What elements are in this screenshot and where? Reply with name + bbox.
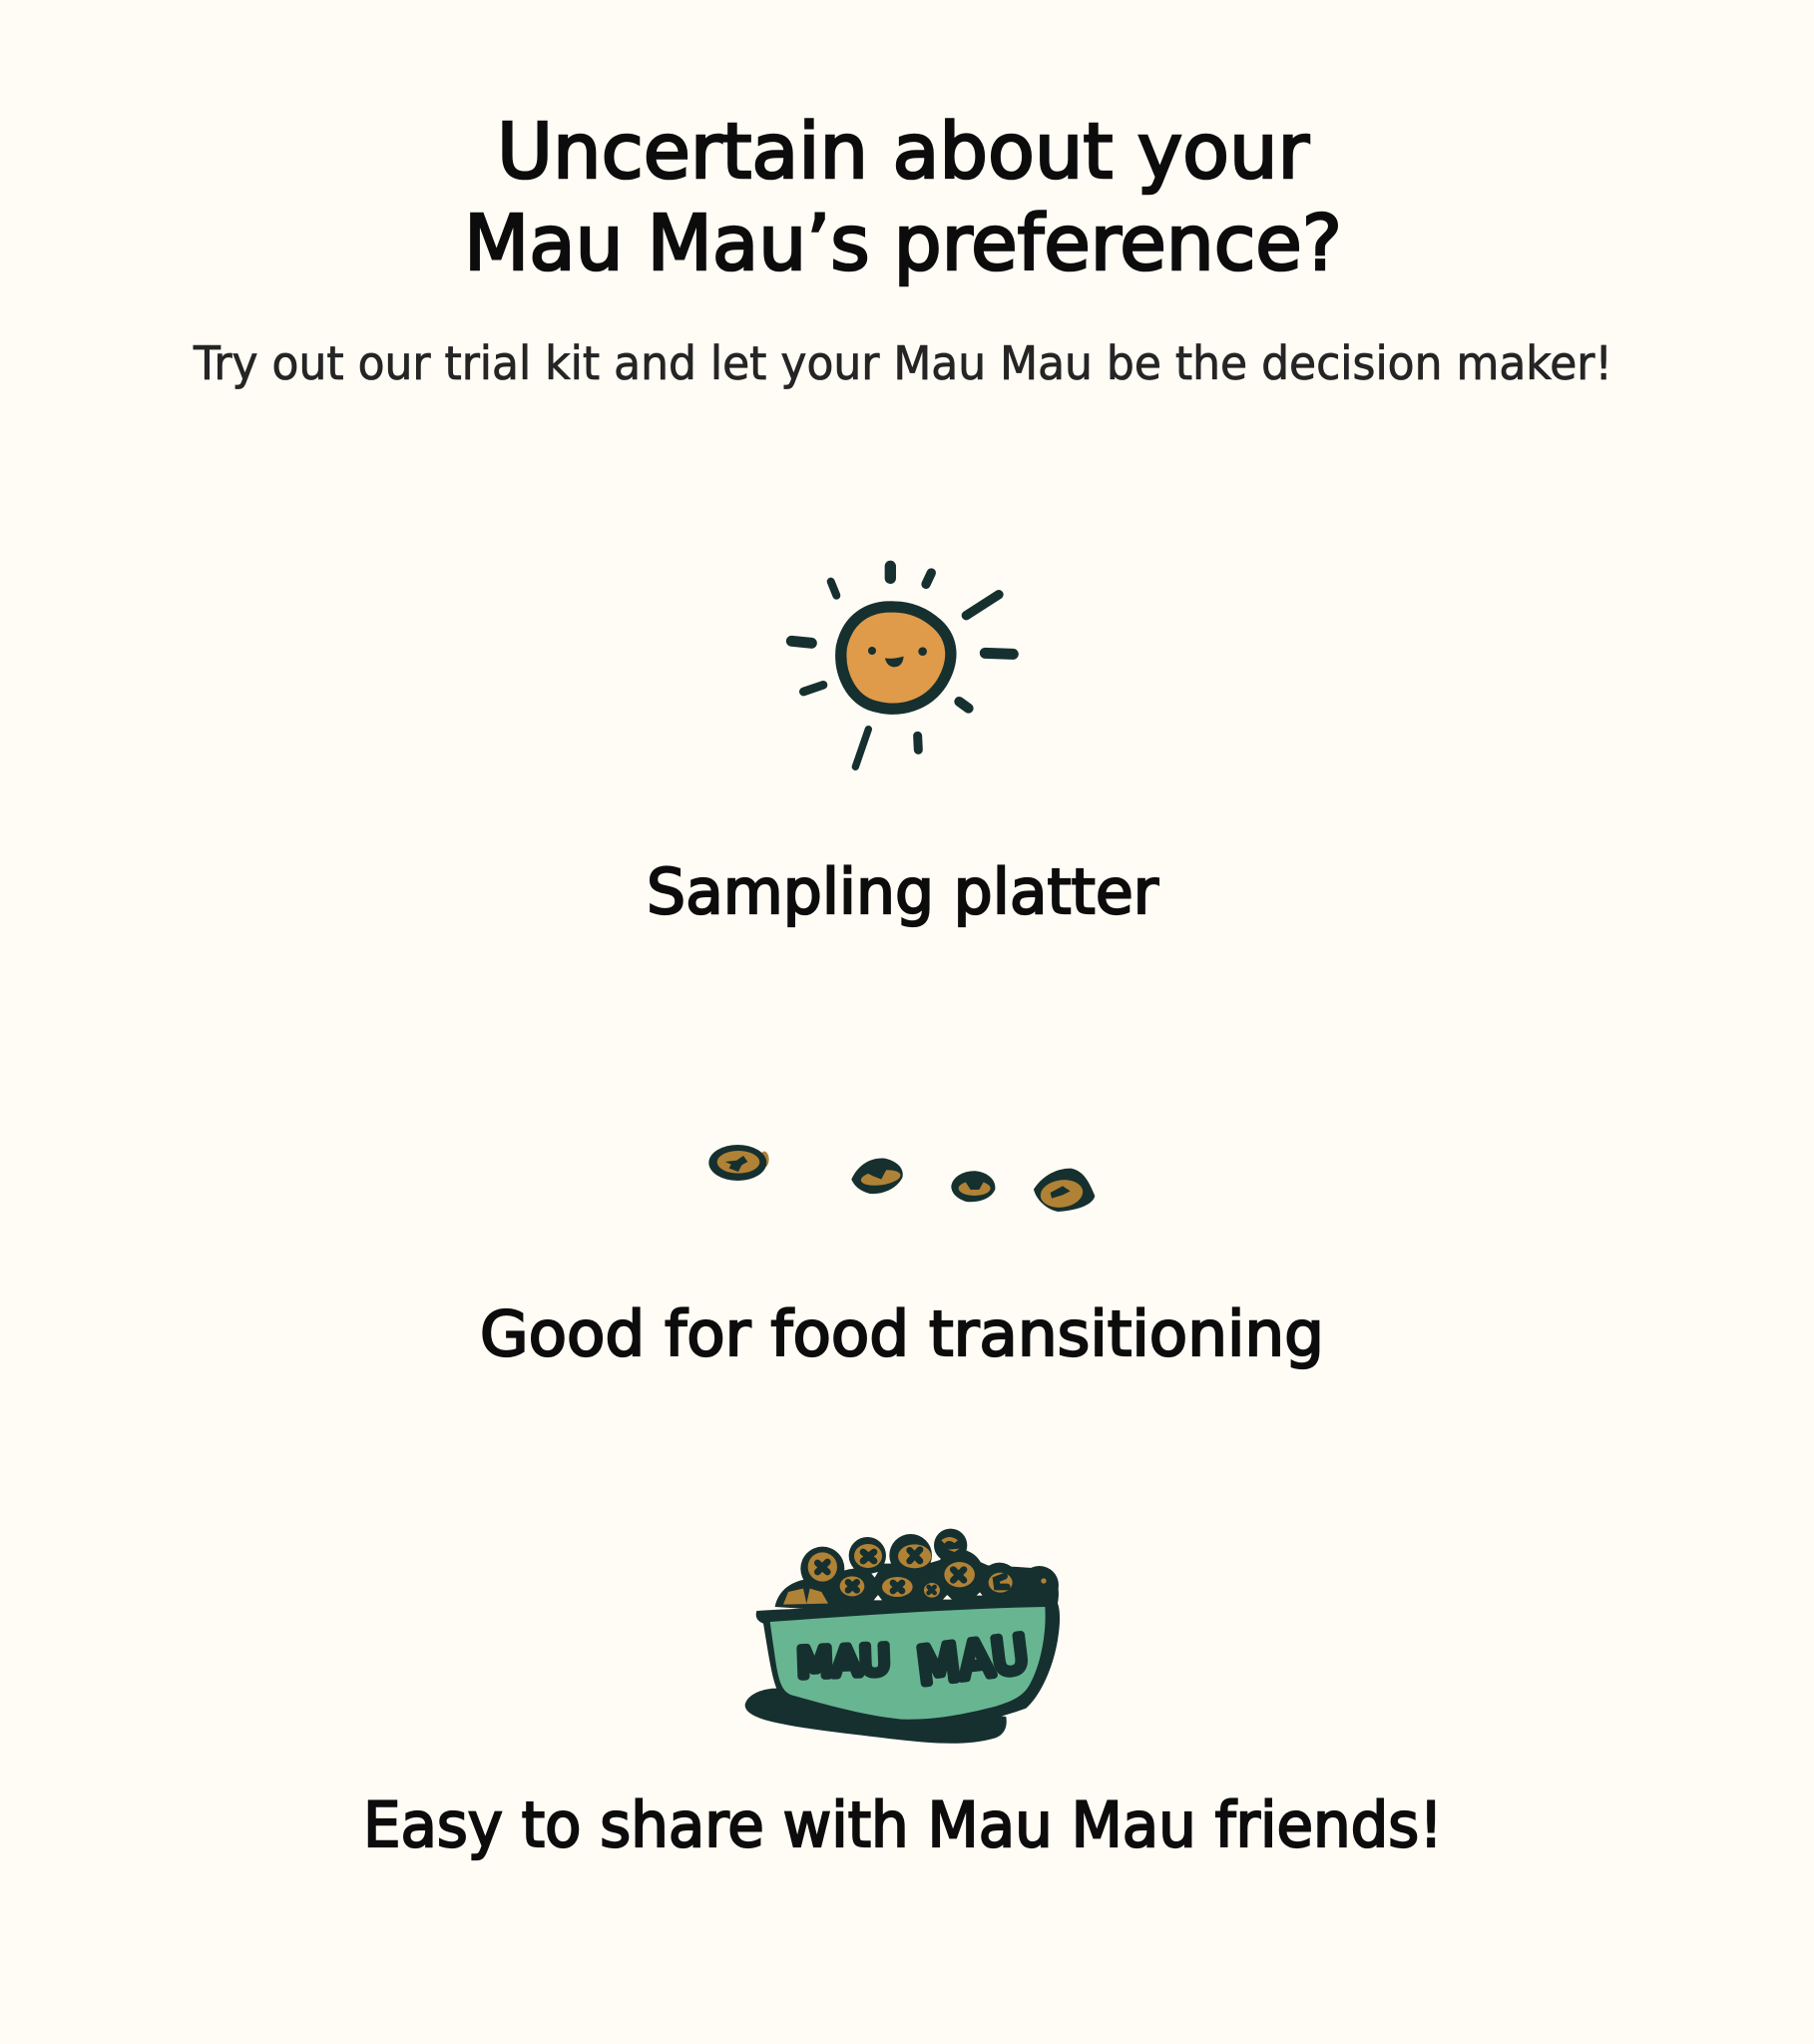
kibble pile [775,1529,1059,1617]
bowl lettering: MAU [796,1639,890,1687]
heading: sampling platter: Sampling platter [647,855,1158,928]
bowl lettering: MAU [914,1625,1031,1696]
icon: kibble pieces [708,1145,1095,1212]
title: Uncertain about your [497,108,1309,197]
title [464,108,1342,288]
bowl shadow [745,1689,1007,1744]
title: Mau Mau’s preference? [464,200,1342,288]
icon: smiling sun [791,566,1013,766]
icon: bowl of kibble [745,1529,1060,1744]
heading: food transitioning: Good for food transitioning [480,1297,1324,1370]
bowl body [756,1600,1060,1728]
bowl lettering [796,1625,1031,1696]
subtitle text: Try out our trial kit and let your Mau Mau be the decision maker! [193,336,1612,390]
heading: share with friends: Easy to share with Mau Mau friends! [363,1788,1443,1861]
